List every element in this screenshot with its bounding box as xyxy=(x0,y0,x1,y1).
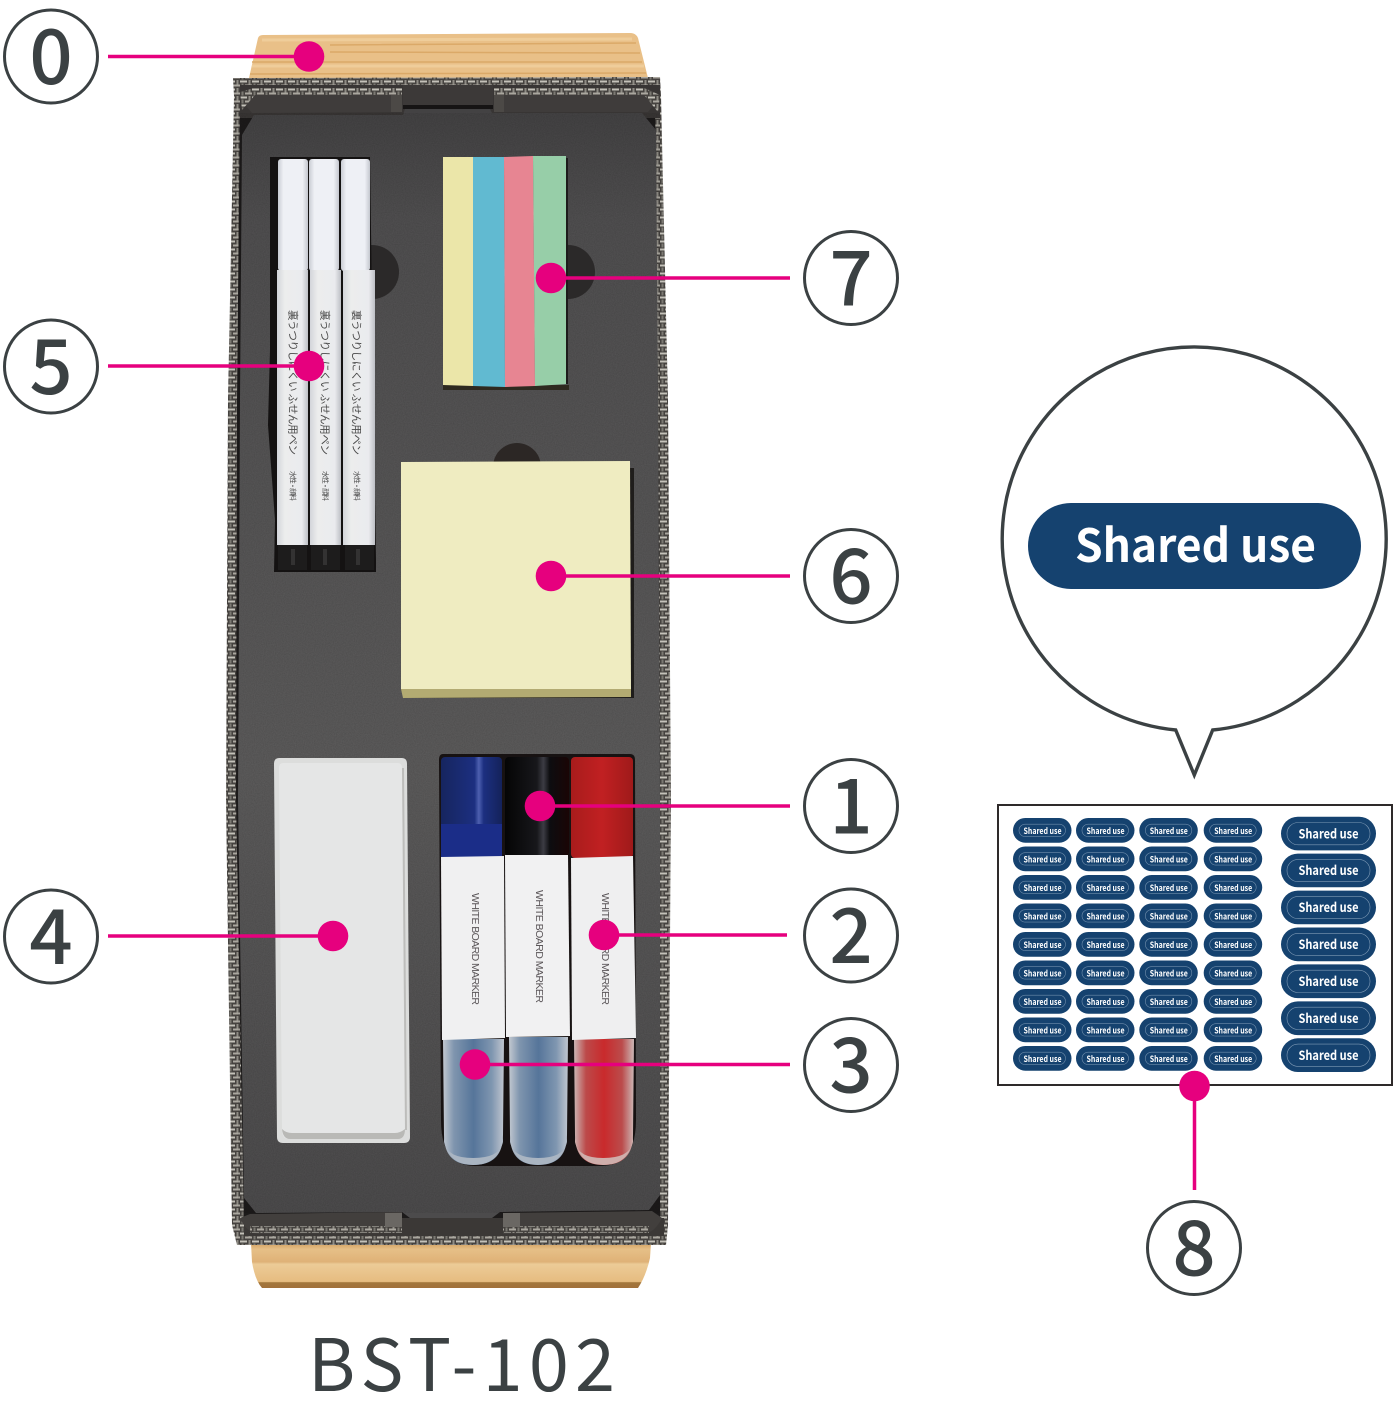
small label text: Shared use xyxy=(1086,1024,1125,1036)
marker slot xyxy=(439,754,636,1166)
small label text xyxy=(1024,825,1252,1065)
callout 3: marker tube xyxy=(460,1004,898,1114)
wooden end: top xyxy=(249,33,648,78)
sticky strips with finger notch xyxy=(443,156,595,390)
enlarged label xyxy=(1028,503,1361,589)
callout 5: pens xyxy=(4,306,324,416)
small label text: Shared use xyxy=(1214,882,1252,894)
small label text: Shared use xyxy=(1024,939,1062,951)
marker: red xyxy=(571,757,636,1165)
callout 7: sticky strips: 7 xyxy=(829,218,873,328)
small label text: Shared use xyxy=(1150,1053,1188,1065)
marker: black xyxy=(505,757,570,1165)
callout 4: eraser: 4 xyxy=(29,876,73,986)
inner dark gap xyxy=(236,98,660,1224)
foam insert xyxy=(238,109,660,1218)
small label text: Shared use xyxy=(1024,882,1062,894)
pen 2: 裏うつりしにくい ふせん用ペン xyxy=(318,310,332,455)
small label text: Shared use xyxy=(1086,1053,1125,1065)
small label inner outlines xyxy=(1019,824,1256,1065)
callout 1: marker cap xyxy=(525,746,898,856)
small label text: Shared use xyxy=(1086,882,1125,894)
marker: blue xyxy=(441,757,505,1165)
small label text: Shared use xyxy=(1086,939,1125,951)
small label text: Shared use xyxy=(1150,968,1188,980)
pen slot and finger notch xyxy=(268,157,399,572)
small label text: Shared use xyxy=(1150,939,1188,951)
small label text: Shared use xyxy=(1086,968,1125,980)
small label text: Shared use xyxy=(1086,825,1125,837)
small label text: Shared use xyxy=(1214,996,1252,1008)
large labels: Shared use xyxy=(1298,823,1358,842)
large labels: Shared use xyxy=(1298,897,1358,916)
small label text: Shared use xyxy=(1150,854,1188,866)
pen 2: 水性・顔料 xyxy=(321,471,330,501)
small label text: Shared use xyxy=(1150,825,1188,837)
small label text: Shared use xyxy=(1150,996,1188,1008)
pen 2 xyxy=(309,159,341,570)
small label text: Shared use xyxy=(1214,854,1252,866)
pen 3: 裏うつりしにくい ふせん用ペン xyxy=(350,310,363,455)
pen 1: 裏うつりしにくい ふせん用ペン xyxy=(286,310,300,455)
small label text: Shared use xyxy=(1214,939,1252,951)
eraser xyxy=(274,758,410,1143)
small label text: Shared use xyxy=(1150,910,1188,922)
callout 6: sticky pad: 6 xyxy=(829,516,873,626)
foam grain xyxy=(238,113,660,1213)
small label text: Shared use xyxy=(1214,968,1252,980)
fabric box shell xyxy=(226,77,671,1245)
bottom flaps xyxy=(237,1211,666,1245)
callout 6: sticky pad xyxy=(536,516,898,626)
small label text: Shared use xyxy=(1150,882,1188,894)
large labels xyxy=(1281,817,1376,1072)
marker: blue: WHITE BOARD MARKER xyxy=(469,893,481,1005)
small label text: Shared use xyxy=(1024,996,1062,1008)
pen 1 xyxy=(277,159,308,570)
marker: red: WHITE BOARD MARKER xyxy=(599,893,611,1005)
large labels: Shared use xyxy=(1298,971,1358,990)
callout 1: marker cap: 1 xyxy=(829,746,873,856)
small label text: Shared use xyxy=(1024,910,1062,922)
product photo: organiser tray xyxy=(226,33,671,1288)
wooden end: bottom xyxy=(251,1243,651,1288)
callout 2: marker label xyxy=(589,875,898,985)
small label text: Shared use xyxy=(1214,910,1252,922)
small label text: Shared use xyxy=(1214,1053,1252,1065)
small label text: Shared use xyxy=(1214,825,1252,837)
large labels: Shared use xyxy=(1298,860,1358,879)
callout 7: sticky strips xyxy=(536,218,898,328)
large labels: Shared use xyxy=(1298,934,1358,953)
callout bubble xyxy=(1002,347,1386,775)
label sheet xyxy=(998,805,1392,1085)
small label text: Shared use xyxy=(1024,854,1062,866)
callout 8: label sheet xyxy=(1148,1071,1240,1298)
small label text: Shared use xyxy=(1086,854,1125,866)
pen 1: 水性・顔料 xyxy=(288,471,298,501)
small label text: Shared use xyxy=(1024,825,1062,837)
small label text: Shared use xyxy=(1086,910,1125,922)
pen 3 xyxy=(341,159,375,570)
callout 0: wooden base xyxy=(4,0,324,106)
top flaps and gap xyxy=(240,85,660,118)
small labels xyxy=(1013,818,1262,1071)
callout 4: eraser xyxy=(4,876,348,986)
large labels: Shared use xyxy=(1298,1045,1358,1064)
large labels: Shared use xyxy=(1298,1008,1358,1027)
small label text: Shared use xyxy=(1024,968,1062,980)
small label text: Shared use xyxy=(1214,1024,1252,1036)
small label text: Shared use xyxy=(1086,996,1125,1008)
pen 3: 水性・顔料 xyxy=(352,471,362,501)
callout 2: marker label: 2 xyxy=(829,875,873,985)
callout 8: label sheet: 8 xyxy=(1172,1188,1216,1298)
small label text: Shared use xyxy=(1150,1024,1188,1036)
callout 3: marker tube: 3 xyxy=(829,1004,873,1114)
small label text: Shared use xyxy=(1024,1024,1062,1036)
callout 5: pens: 5 xyxy=(29,306,73,416)
enlarged label: Shared use xyxy=(1075,510,1316,576)
marker: black: WHITE BOARD MARKER xyxy=(533,890,545,1003)
small label text: Shared use xyxy=(1024,1053,1062,1065)
large sticky pad with finger notch xyxy=(401,443,634,698)
